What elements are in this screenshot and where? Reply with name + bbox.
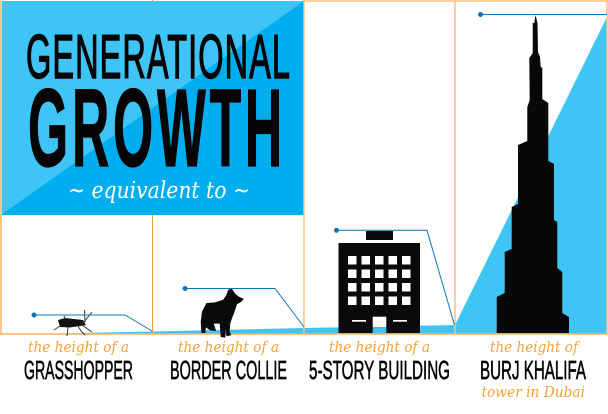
label: border collie: the height of a bbox=[178, 340, 279, 356]
title: generational: GENERATIONAL bbox=[26, 23, 291, 92]
icon: border collie bbox=[201, 289, 243, 337]
label: border collie: BORDER COLLIE bbox=[170, 355, 287, 385]
height marker: border collie bbox=[182, 286, 304, 327]
height marker: burj khalifa bbox=[478, 12, 607, 17]
rising ground wedge bbox=[30, 17, 607, 334]
subtitle: ~ equivalent to ~ bbox=[68, 178, 250, 204]
panel: title block: GROWTH bbox=[28, 67, 286, 190]
label: burj khalifa: the height of bbox=[490, 340, 580, 356]
label: burj khalifa bbox=[480, 340, 586, 401]
label: border collie bbox=[170, 340, 287, 385]
label: grasshopper: GRASSHOPPER bbox=[24, 355, 133, 385]
label: burj khalifa: tower in Dubai bbox=[482, 385, 585, 401]
label: building bbox=[309, 340, 450, 385]
label: grasshopper: the height of a bbox=[28, 340, 129, 356]
icon: burj khalifa tower bbox=[497, 15, 569, 333]
icon: grasshopper bbox=[54, 310, 92, 336]
height marker: grasshopper bbox=[32, 312, 152, 331]
label: building: the height of a bbox=[329, 340, 430, 356]
label: building: 5-STORY BUILDING bbox=[309, 355, 450, 385]
building windows bbox=[348, 256, 410, 327]
label: grasshopper bbox=[24, 340, 133, 385]
height marker: building bbox=[334, 228, 454, 325]
panel: title block bbox=[1, 1, 304, 215]
icon: office building bbox=[338, 231, 420, 333]
